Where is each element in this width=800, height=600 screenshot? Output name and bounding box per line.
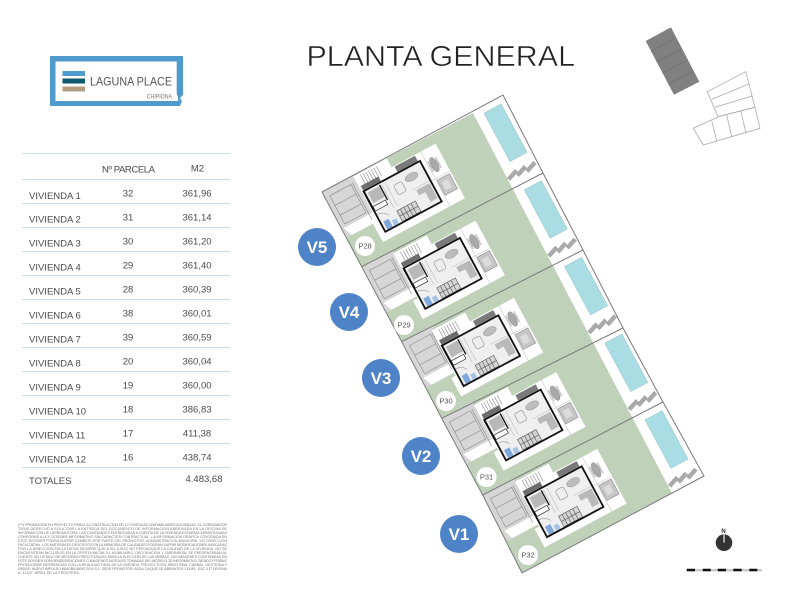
table row 12: VIVIENDA 12	[29, 454, 86, 466]
table row 2: 31	[123, 212, 133, 224]
table row 7: 39	[123, 332, 133, 344]
table header	[102, 164, 204, 176]
house P29	[389, 212, 505, 319]
table row 10	[29, 404, 212, 418]
table row 8: 20	[123, 356, 133, 368]
table row 12: 438,74	[182, 452, 212, 464]
logo stripes	[62, 71, 85, 92]
table totals	[29, 474, 222, 487]
table totals: 4.483,68	[186, 474, 222, 485]
table row 6: VIVIENDA 6	[29, 310, 81, 322]
north indicator: N	[721, 529, 726, 535]
table row 12: 16	[123, 452, 133, 464]
table row 4: 361,40	[182, 260, 212, 272]
legal note: CONFORME A LEY. DOSSIER INFORMATIVO SIN CARACTER CONTRACTUAL. LA INFORMACION GRAFICA CONTENIDA EN	[18, 535, 227, 539]
table row 11: 17	[123, 428, 133, 440]
legal note: (***) PROMOCION EN PROYECTO PARA LA CONSTRUCCION DE 12 VIVIENDAS UNIFAMILIARES ADOSADAS. EL CONSUMIDOR	[18, 523, 227, 527]
table row 6	[29, 308, 212, 322]
table row 1: 361,96	[182, 188, 212, 200]
table row 3: 30	[123, 236, 133, 248]
label P31	[476, 467, 496, 487]
table row 8: VIVIENDA 8	[29, 358, 81, 370]
table row 4: VIVIENDA 4	[29, 262, 81, 274]
table row 9: VIVIENDA 9	[29, 382, 81, 394]
carport P30	[402, 325, 457, 388]
legal note: DIRIGE: NUEVO IMPULSO INMOBILIARIO 2010 S.L. SEDE PROMOTOR: AVDA. DUQUE DE ABRANTES 1 DUPL. ESC 3 1º OFICINA	[18, 567, 228, 571]
badge V2: V2	[411, 447, 431, 466]
table row 12	[29, 452, 212, 466]
pool P30	[555, 256, 619, 336]
legal note: ESTE DOSSIER SON RENDERIZACIONES O IMAGENES DIGITALES TOMADAS DEL MODELO 3D INFORMATIVO, SIENDO POSIBLE	[18, 559, 228, 563]
table row 8: 360,04	[182, 356, 212, 368]
table header: M2	[191, 164, 204, 174]
label P29	[394, 315, 414, 335]
table row 3	[29, 236, 212, 250]
badge V4	[330, 293, 368, 331]
legal note: ENCUENTRAN INCLUIDOS EN LA OFERTA INICIAL EL MOBILIARIO, DECORACION Y JARDINERIA. SE PRESENTARAN AL	[18, 551, 227, 555]
label P32: P32	[521, 551, 535, 560]
table header: Nº PARCELA	[102, 164, 156, 176]
table row 1	[29, 188, 212, 202]
table row 3: VIVIENDA 3	[29, 238, 81, 250]
legal note: POR LA DIRECCION FACULTATIVA SIEMPRE QUE A SU JUICIO NO PERJUDIQUE LA CALIDAD DE LA VIVIENDA. NO SE	[18, 547, 228, 551]
title: PLANTA GENERAL	[306, 41, 575, 73]
table row 5: 360,39	[182, 284, 212, 296]
table row 2	[29, 212, 212, 226]
legal note	[18, 523, 228, 575]
label P30	[436, 391, 456, 411]
pool P31	[596, 333, 659, 413]
badge V5	[298, 228, 336, 266]
table row 4	[29, 260, 212, 274]
table row 1: VIVIENDA 1	[29, 191, 81, 202]
table row 11: VIVIENDA 11	[29, 430, 85, 442]
label P32	[518, 545, 538, 565]
carport P31	[442, 402, 497, 464]
pool P29	[515, 179, 579, 260]
house badges	[298, 228, 478, 553]
carport P28	[322, 175, 377, 238]
label P29: P29	[397, 321, 411, 330]
logo location: CHIPIONA	[147, 94, 172, 100]
table row 5	[29, 284, 212, 298]
scale bar	[687, 569, 762, 572]
badge V3: V3	[371, 369, 391, 388]
key map: other blocks	[693, 72, 760, 145]
table row 4: 29	[123, 260, 133, 272]
plot labels	[355, 236, 538, 565]
logo name: LAGUNA PLACE	[90, 74, 172, 88]
table row 5: VIVIENDA 5	[29, 286, 81, 298]
table row 10: 386,83	[182, 404, 212, 416]
pool P32	[636, 409, 700, 490]
table row 10: VIVIENDA 10	[29, 406, 86, 418]
badge V2	[402, 437, 440, 475]
key map: highlighted block	[646, 27, 699, 95]
table row 2: 361,14	[182, 212, 212, 224]
logo: Laguna Place	[50, 56, 183, 106]
table row 7: VIVIENDA 7	[29, 334, 81, 346]
table row 11: 411,38	[183, 428, 211, 440]
key map	[646, 27, 760, 145]
table row 9	[29, 380, 212, 394]
legal note: FACULTATIVA. LOS MATERIALES DESCRITOS EN LA MEMORIA DE CALIDADES PODRAN SUFRIR MODIFICACIONES INDICADAS	[18, 543, 228, 547]
table row 9: 19	[123, 380, 133, 392]
carport P32	[483, 478, 538, 541]
badge V3	[362, 359, 400, 397]
legal note: ESTE DOSSIER PODRA SUFRIR CAMBIOS POR PARTE DEL PROMOTOR, ADMINISTRACION MUNICIPAL Y/O DIRECCION	[18, 539, 227, 543]
plot boundaries	[322, 95, 704, 573]
table row 6: 38	[123, 308, 133, 320]
garden area	[322, 113, 672, 573]
table row 5: 28	[123, 284, 133, 296]
label P28	[355, 236, 375, 256]
label P30: P30	[439, 397, 453, 406]
carport P29	[362, 250, 417, 313]
table row 11	[29, 428, 211, 442]
table row 2: VIVIENDA 2	[29, 214, 81, 226]
north indicator	[716, 529, 732, 551]
legal note: PRODUCIRSE DIFERENCIAS CON LA REALIDAD FINAL DE LA VIVIENDA. PROYECTISTA: IÑIGO REAL CARBAL. GESTIONA Y	[18, 562, 228, 567]
table row 7: 360,59	[182, 332, 212, 344]
table row 7	[29, 332, 212, 346]
site plan: five plots	[322, 95, 704, 573]
house P32	[511, 440, 627, 547]
legal note: A, 11407 JEREZ DE LA FRONTERA.	[18, 571, 80, 575]
table row 8	[29, 356, 212, 370]
legal note: INFORMACION DE LAPROMOTORA. LAS CANTIDADES ENTREGADAS A CUENTA DE LA VIVIENDA ESTARAN GARANTIZADAS	[18, 531, 228, 535]
house P28	[349, 135, 465, 242]
badge V5: V5	[307, 238, 327, 257]
pool P28	[475, 103, 539, 183]
house P31	[470, 363, 586, 471]
badge V1: V1	[449, 525, 469, 544]
label P31: P31	[480, 473, 493, 482]
table row 9: 360,00	[182, 380, 212, 392]
table totals: TOTALES	[29, 476, 71, 487]
legal note: TIENE DERECHO A SOLICITAR LA ENTREGA DEL DOCUMENTO DE INFORMACION ABREVIADA EN LA OFICINA DE	[18, 527, 228, 531]
house P30	[427, 289, 543, 396]
table row 10: 18	[123, 404, 133, 416]
table row 6: 360,01	[182, 308, 212, 320]
label P28: P28	[358, 242, 372, 251]
badge V1	[440, 515, 478, 553]
badge V4: V4	[339, 303, 360, 322]
legal note: CLIENTE UN LISTADO DE MEJORAS PRECOTIZADAS PARA LA ELECCION DE LAS MISMAS. LAS IMAGENES CONTENIDAS EN	[18, 555, 227, 559]
table: plots and areas	[22, 154, 230, 487]
table row 1: 32	[123, 188, 133, 200]
table row 3: 361,20	[182, 236, 212, 248]
